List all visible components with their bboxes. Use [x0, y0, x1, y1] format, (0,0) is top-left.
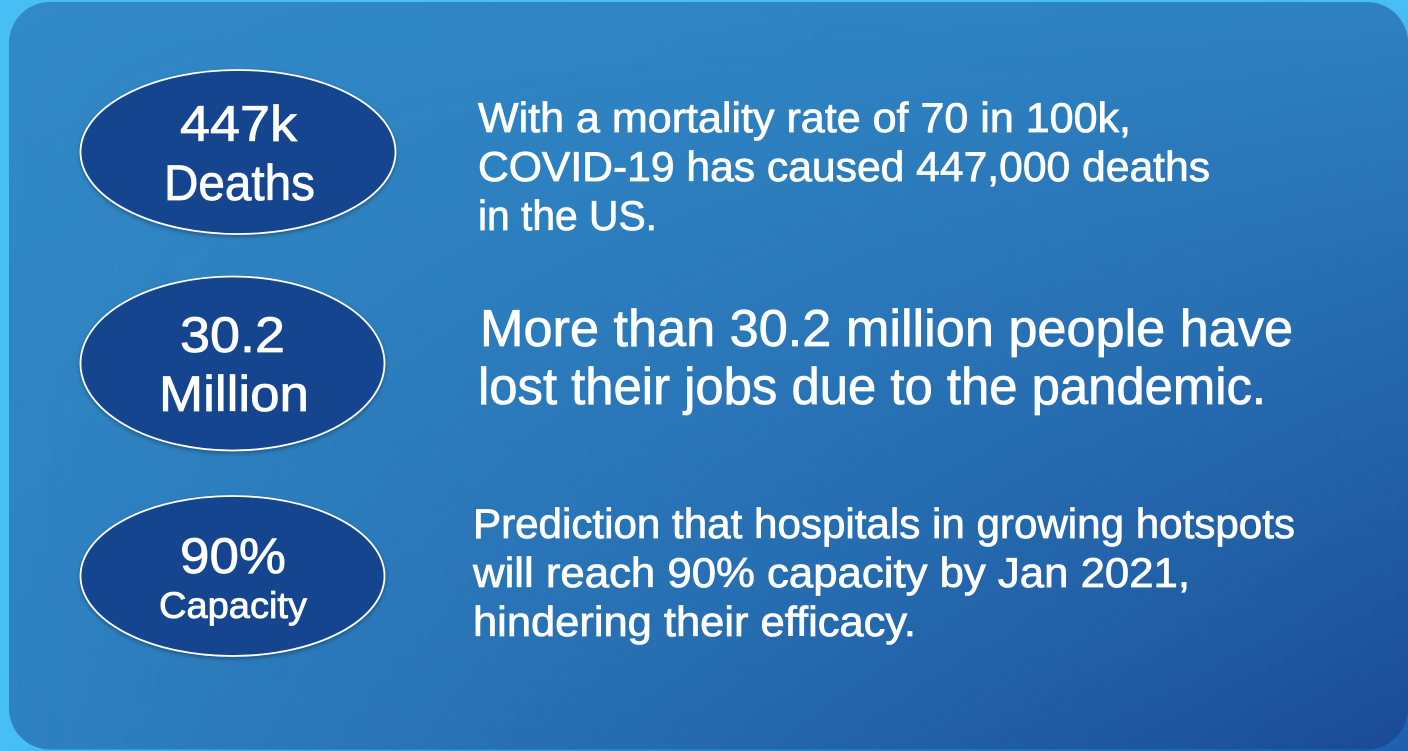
oval label: 30.2: 30.2	[180, 307, 285, 363]
oval label: Million: Million	[159, 366, 309, 422]
oval: 90% capacity	[80, 496, 384, 656]
oval label: Deaths: Deaths	[164, 155, 315, 211]
description: jobs	[478, 300, 1293, 416]
description: mortality	[478, 94, 1210, 239]
oval: 447k	[80, 70, 396, 234]
stat: 30.2 million	[80, 276, 384, 450]
description: jobs: More than 30.2 million people have	[480, 300, 1293, 358]
oval: 30.2 million	[80, 276, 384, 450]
stat: 447k deaths	[80, 70, 396, 234]
description: mortality: in the US.	[478, 192, 657, 239]
stat: 90% capacity	[80, 496, 384, 656]
description: hospitals: Prediction that hospitals in growing hotspots	[473, 500, 1295, 547]
description: hospitals: hindering their efficacy.	[473, 598, 916, 645]
description: mortality: With a mortality rate of 70 in 100k,	[478, 94, 1131, 141]
description: mortality: COVID-19 has caused 447,000 deaths	[478, 143, 1210, 190]
description: jobs: lost their jobs due to the pandemic.	[478, 358, 1266, 416]
oval label: Capacity: Capacity	[159, 585, 308, 626]
oval label: 90%: 90%	[180, 528, 286, 584]
oval label: 447k: 447k	[180, 96, 298, 152]
description: hospitals: will reach 90% capacity by Jan 2021,	[472, 549, 1190, 596]
description: hospitals	[472, 500, 1295, 645]
